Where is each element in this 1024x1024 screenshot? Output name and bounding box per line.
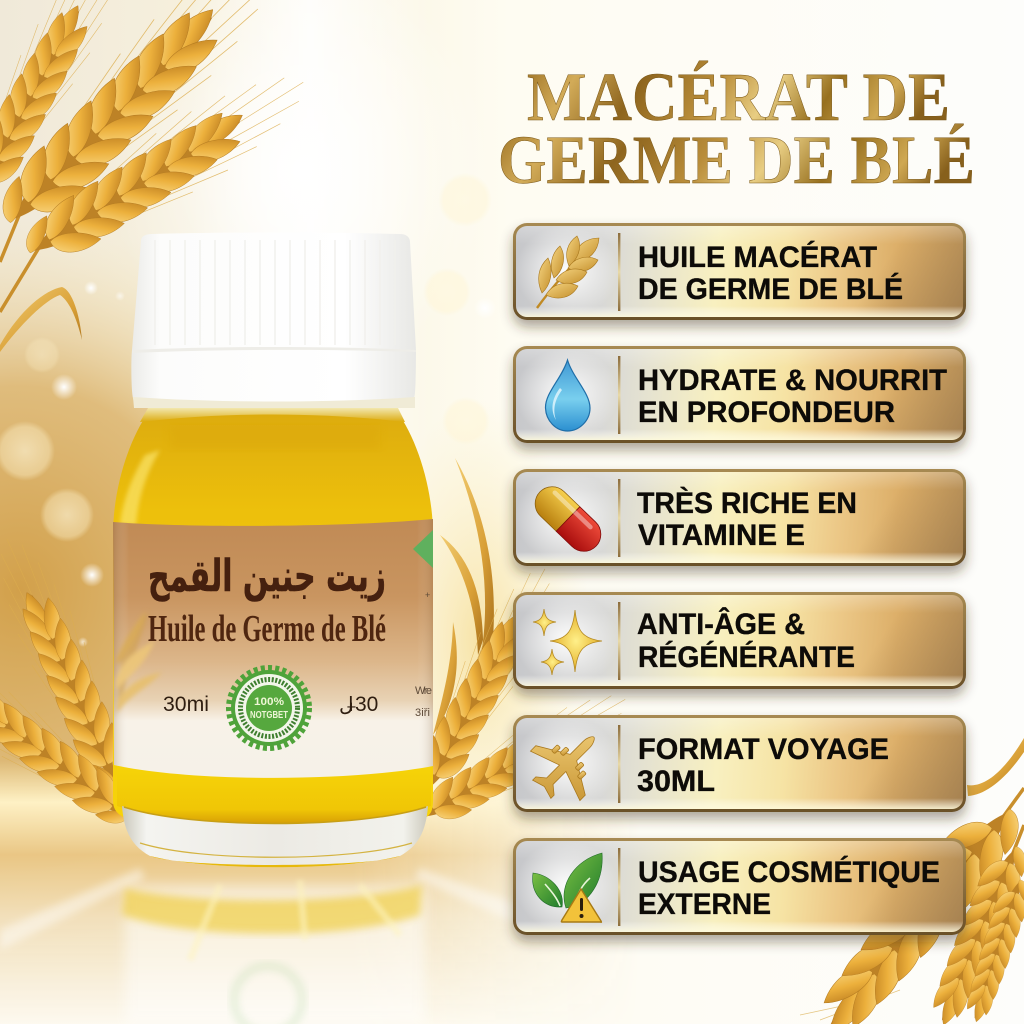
glass base [122, 806, 428, 867]
panel: usage cosmétique: EXTERNE [638, 888, 771, 921]
title [498, 59, 975, 198]
neck [140, 408, 405, 422]
panel: vitamine: TRÈS RICHE EN [637, 486, 857, 520]
wheat: right of bottle [401, 458, 638, 842]
bottle glass and oil [113, 410, 433, 818]
icon: wheat [537, 236, 599, 308]
oil highlights [120, 425, 380, 525]
panel: huile macérat: DE GERME DE BLÉ [638, 272, 903, 306]
yellow oil band [117, 765, 431, 824]
label wheat motif [116, 610, 162, 715]
panel: usage cosmétique [513, 838, 966, 935]
panel: anti-age: RÉGÉNÉRANTE [638, 640, 855, 674]
wheat: bottom left [0, 527, 148, 841]
wheat: bottom right [797, 738, 1024, 1024]
title: GERME DE BLÉ [498, 122, 975, 198]
volume right: 30 [355, 693, 378, 716]
panel: anti-age: ANTI-ÂGE & [637, 607, 805, 641]
icon: leaves and warning [533, 853, 602, 922]
label french title: Huile de Germe de Blé [148, 608, 386, 650]
bottle reflection [122, 880, 425, 1024]
badge: 100% [229, 668, 309, 748]
side small text: Wre [415, 685, 432, 697]
panel: huile macérat: HUILE MACÉRAT [638, 240, 877, 274]
badge: 100%: NOTGBET [250, 709, 288, 721]
label arabic title: زيت جنين القمح [148, 551, 386, 602]
label [113, 519, 433, 778]
panel: vitamine [513, 469, 966, 566]
wheat: top left [0, 0, 322, 352]
bokeh lights [0, 173, 496, 647]
panel: format voyage [513, 712, 966, 814]
panel: hydrate [513, 346, 966, 443]
badge: 100%: 100% [254, 696, 284, 708]
panel: usage cosmétique: USAGE COSMÉTIQUE [638, 855, 940, 889]
volume left: 30mi [163, 693, 209, 716]
panel: format voyage: FORMAT VOYAGE [638, 733, 889, 766]
icon: water drop [545, 360, 590, 431]
panel: huile macérat [513, 223, 966, 320]
side small text [415, 590, 432, 719]
panel: anti-age [513, 592, 966, 689]
background [0, 0, 614, 1020]
side small text: 3iři [415, 707, 430, 719]
panel: vitamine: VITAMINE E [638, 519, 805, 552]
bottle cap [131, 232, 416, 408]
side small text: + [425, 590, 430, 600]
panel: hydrate: EN PROFONDEUR [638, 396, 895, 429]
icon: airplane [517, 712, 619, 814]
volume right [339, 692, 378, 716]
volume right: ل [339, 692, 354, 716]
bottle [113, 232, 433, 867]
volume right: + [346, 700, 357, 715]
title: MACÉRAT DE [527, 59, 950, 135]
panel: hydrate: HYDRATE & NOURRIT [638, 364, 947, 397]
panel: format voyage: 30ML [637, 765, 715, 798]
icon: capsule [528, 480, 608, 558]
icon: sparkles [533, 609, 602, 675]
label green corner [413, 530, 433, 568]
